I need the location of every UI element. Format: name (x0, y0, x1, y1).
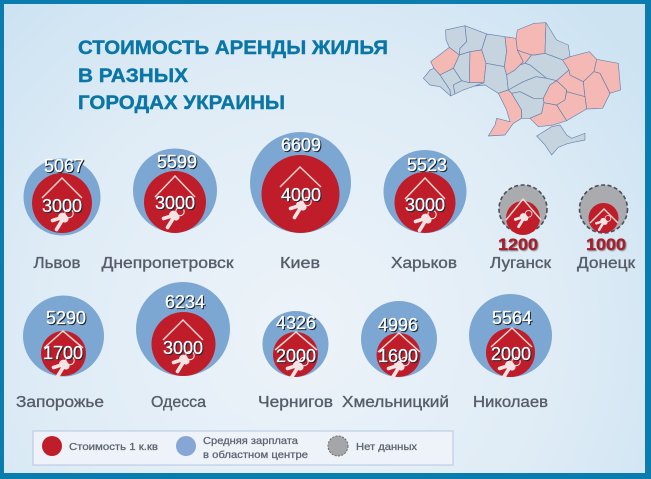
legend: в областном центре (203, 449, 308, 461)
city: Одесса: Одесса (151, 394, 206, 411)
city: Хмельницкий: 4996 (378, 315, 418, 335)
city: Киев: 4000 (281, 185, 321, 205)
city: Чернигов: 2000 (276, 346, 316, 366)
city: Киев: Киев (280, 255, 320, 272)
city: Чернигов: Чернигов (258, 394, 333, 411)
city: Донецк: Донецк (577, 255, 636, 272)
city: Запорожье: 1700 (43, 343, 83, 363)
city: Луганск: Луганск (490, 255, 552, 272)
legend: Средняя зарплата (203, 435, 298, 447)
legend: Нет данных (356, 441, 418, 453)
city: Львов (24, 156, 100, 272)
city: Запорожье: 5290 (46, 308, 86, 328)
title (78, 37, 388, 114)
city: Харьков: 5523 (407, 155, 447, 175)
city: Киев: 6609 (281, 135, 321, 155)
city: Чернигов: 4326 (276, 313, 316, 333)
city: Хмельницкий: Хмельницкий (342, 394, 449, 411)
city: Николаев: 2000 (491, 344, 531, 364)
city: Хмельницкий: 1600 (378, 346, 418, 366)
city: Киев (250, 132, 351, 272)
city: Днепропетровск: 5599 (157, 152, 197, 172)
map of Ukraine (423, 23, 621, 155)
city: Донецк: 1000 (586, 236, 626, 254)
city: Одесса: 3000 (163, 338, 203, 358)
city: Луганск: 1200 (498, 236, 538, 254)
city: Львов: Львов (34, 255, 80, 272)
city: Донецк (577, 185, 636, 272)
title: ГОРОДАХ УКРАИНЫ (78, 92, 285, 114)
city: Хмельницкий (342, 301, 449, 411)
city: Чернигов (258, 311, 333, 411)
city: Запорожье (16, 296, 104, 411)
title: В РАЗНЫХ (78, 65, 188, 87)
city: Харьков (384, 150, 466, 272)
city: Луганск (490, 185, 552, 272)
city: Одесса: 6234 (165, 292, 205, 312)
city: Николаев: Николаев (473, 394, 548, 411)
legend: Стоимость 1 к.кв (69, 441, 158, 453)
city: Харьков: 3000 (405, 195, 445, 215)
city: Николаев (469, 294, 552, 411)
city: Львов: 3000 (42, 196, 82, 216)
city: Николаев: 5564 (492, 308, 532, 328)
city: Харьков: Харьков (391, 255, 457, 272)
city: Днепропетровск: 3000 (155, 193, 195, 213)
title: СТОИМОСТЬ АРЕНДЫ ЖИЛЬЯ (78, 37, 388, 59)
city: Днепропетровск (102, 148, 235, 272)
city: Днепропетровск: Днепропетровск (102, 255, 235, 272)
city: Одесса (136, 282, 230, 411)
city: Запорожье: Запорожье (16, 394, 104, 411)
legend (33, 431, 453, 465)
city: Львов: 5067 (44, 156, 84, 176)
